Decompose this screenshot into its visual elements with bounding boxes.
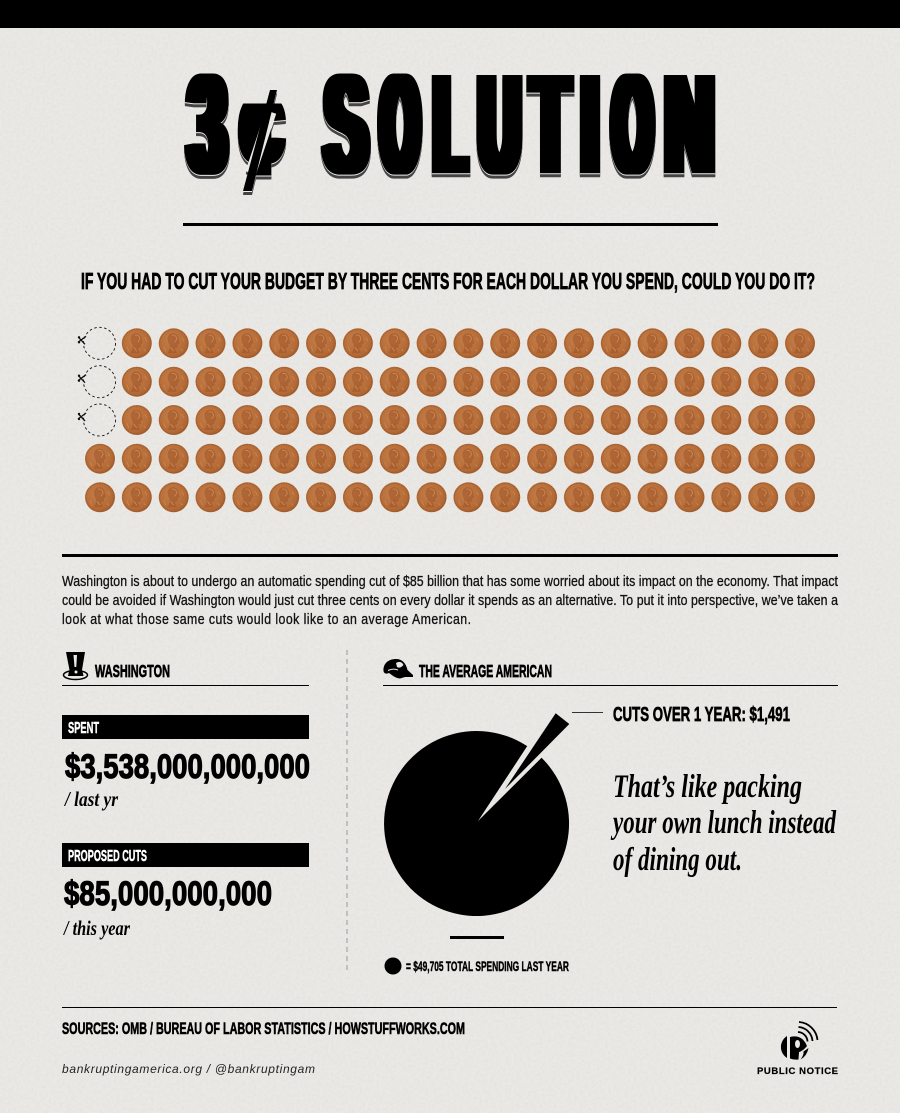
pie chart: spending with cut slice [384, 713, 569, 916]
footer rule [62, 1007, 837, 1008]
title: ¢ [242, 59, 282, 200]
title: L [434, 45, 466, 202]
intro paragraph [62, 573, 838, 627]
legend: = $49,705 TOTAL SPENDING LAST YEAR [406, 958, 569, 974]
title [184, 74, 716, 195]
icon: trucker cap [383, 659, 413, 678]
heading: the average American: THE AVERAGE AMERICAN [419, 661, 552, 681]
sources: SOURCES: OMB / BUREAU OF LABOR STATISTICS / HOWSTUFFWORKS.COM [62, 1020, 465, 1038]
website and handle: bankruptingamerica.org / @bankruptingam [62, 1062, 315, 1076]
top black bar [0, 0, 900, 28]
leader line [572, 712, 603, 713]
title rule [183, 223, 718, 226]
label bar: spent: SPENT [68, 720, 99, 737]
label bar: spent [62, 715, 309, 739]
intro paragraph: Washington is about to undergo an automatic spending cut of $85 billion that has some worried about its impact on the economy. That impact [62, 573, 838, 589]
label bar: proposed cuts [62, 843, 309, 867]
text: N [665, 45, 714, 202]
pie underline [450, 936, 504, 939]
penny grid: 100 cents with 3 cut out [78, 327, 815, 512]
wordmark: PUBLIC NOTICE [757, 1066, 838, 1077]
panel: Washington [62, 652, 310, 940]
label bar: proposed cuts: PROPOSED CUTS [68, 848, 147, 865]
whole pennies [85, 328, 815, 512]
title: O [381, 45, 419, 202]
panel: the average American [383, 659, 838, 974]
script comparison text [610, 769, 836, 878]
legend [384, 958, 569, 974]
title: O [613, 45, 652, 202]
title: T [532, 45, 569, 202]
callout: cuts over 1 year: CUTS OVER 1 YEAR: $1,491 [613, 703, 790, 726]
title: I [582, 45, 598, 202]
note: this year: / this year [62, 916, 131, 940]
script comparison text: That’s like packing [613, 769, 802, 805]
heading: Washington: WASHINGTON [95, 661, 170, 681]
cut-out pennies with scissors [78, 327, 116, 436]
intro paragraph: look at what those same cuts would look like to an average American. [62, 611, 471, 627]
section rule [62, 554, 838, 557]
title: U [479, 45, 520, 202]
logo: Public Notice [757, 1022, 838, 1077]
icon: top hat [64, 652, 88, 680]
title: 3 [188, 45, 226, 202]
icon: broadcast P [781, 1022, 818, 1060]
intro paragraph: could be avoided if Washington would just cut three cents on every dollar it spends as an alternative. To put it into perspective, we’ve taken a [62, 592, 838, 608]
script comparison text: of dining out. [613, 842, 742, 878]
title: S [325, 45, 367, 202]
value: proposed cuts: $85,000,000,000 [64, 875, 272, 913]
note: last yr: / last yr [63, 787, 119, 811]
column divider [346, 650, 348, 972]
value: spent: $3,538,000,000,000 [65, 748, 310, 786]
